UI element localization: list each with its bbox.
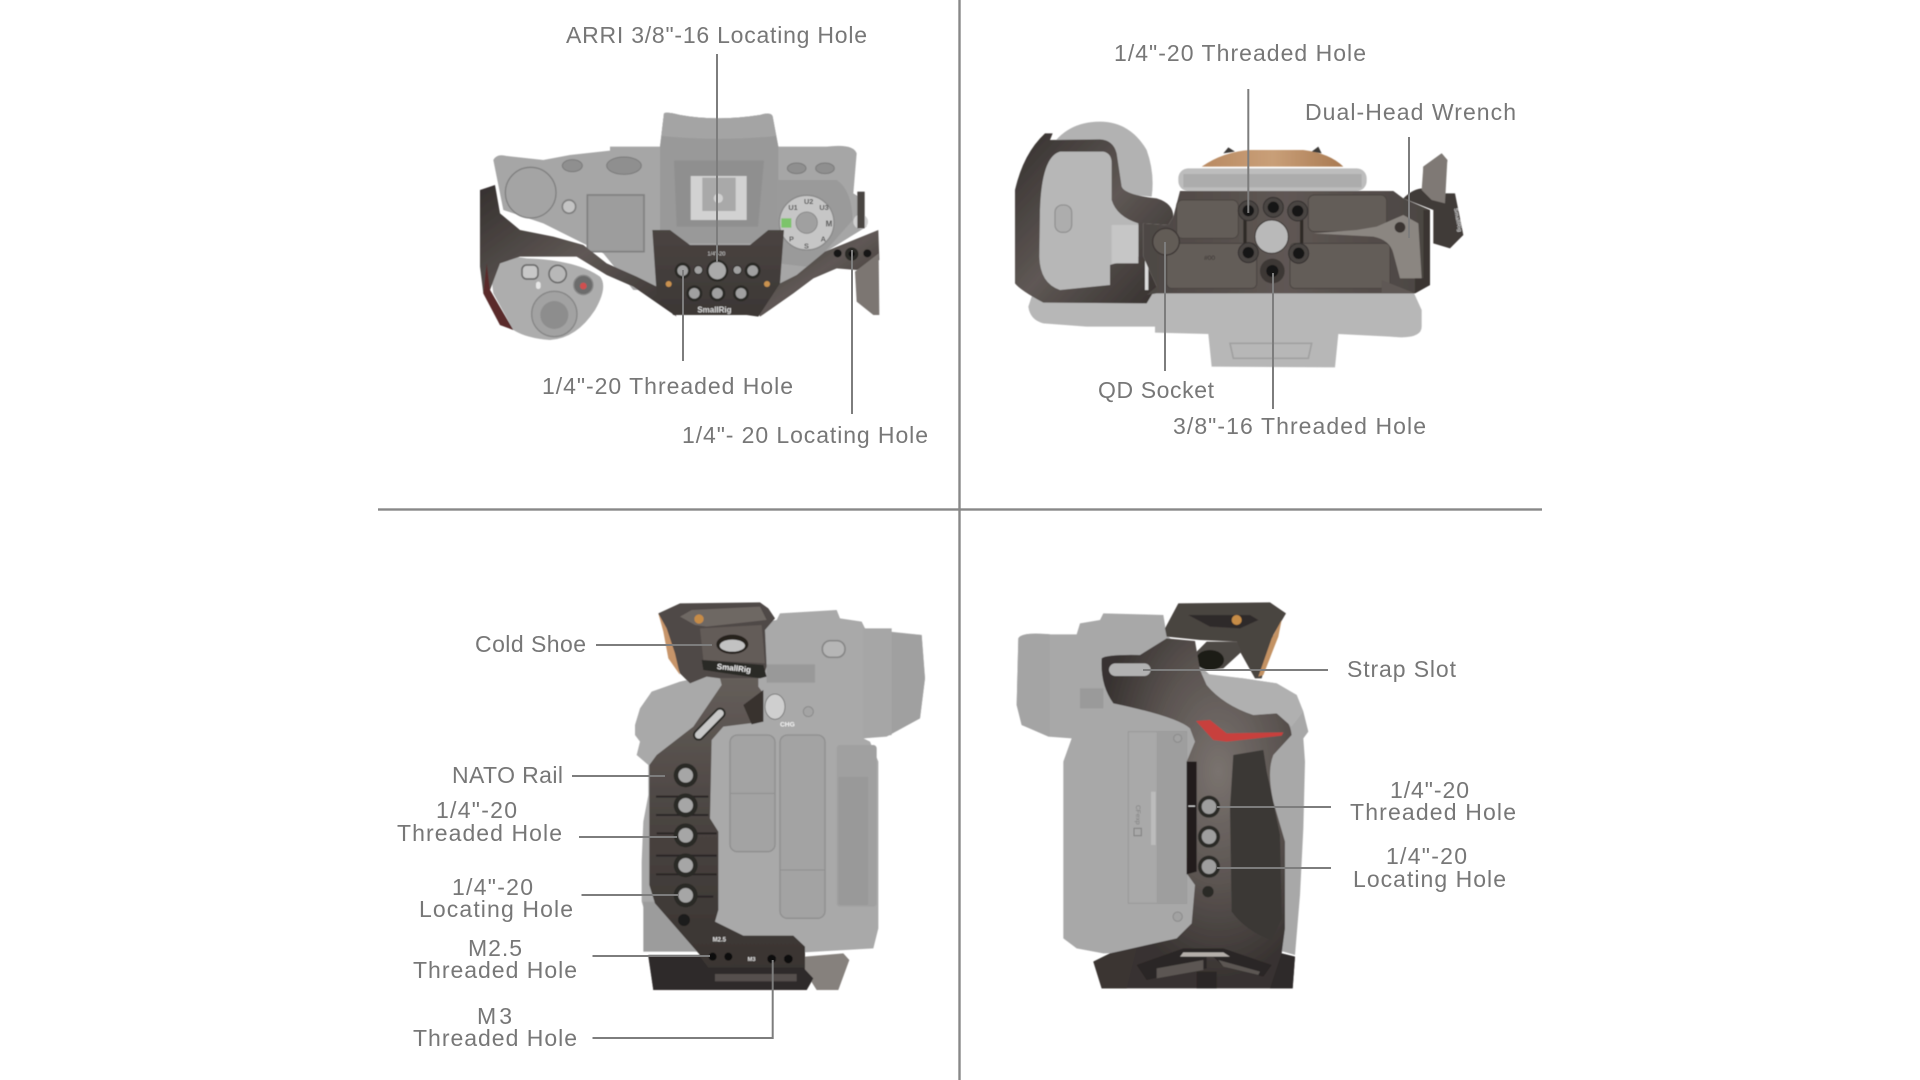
dark base	[648, 957, 813, 990]
base	[1093, 948, 1137, 988]
grip top	[490, 257, 603, 340]
label: M2.5 threaded hole	[413, 935, 710, 983]
lens cap	[1202, 150, 1343, 167]
rubber pad	[1230, 750, 1282, 940]
lower chamfer	[1382, 280, 1415, 293]
mode dial letters: P	[789, 235, 794, 244]
plate pockets	[1167, 195, 1390, 288]
gusset	[743, 690, 763, 724]
panel: top view	[480, 22, 928, 448]
label: strap slot: Strap Slot	[1347, 656, 1457, 682]
mode dial letters: A	[821, 235, 827, 244]
camera top view with cage	[480, 113, 879, 340]
foot	[805, 953, 849, 990]
mode dial letters: M	[826, 220, 833, 229]
side door	[1128, 732, 1187, 903]
wrench	[1313, 215, 1422, 278]
battery door	[1039, 152, 1138, 290]
label: locating hole: Locating Hole	[1353, 866, 1506, 892]
viewfinder	[660, 113, 778, 243]
label: QD socket: QD Socket	[1098, 377, 1215, 403]
logo: SmallRig	[697, 306, 732, 315]
top controls	[505, 167, 556, 218]
label: cold shoe: Cold Shoe	[475, 631, 586, 657]
plate holes	[666, 260, 770, 301]
strap slot	[1109, 663, 1151, 676]
label: M2.5 threaded hole: Threaded Hole	[413, 957, 577, 983]
horizontal divider	[378, 508, 1542, 511]
eyepiece	[892, 632, 925, 733]
camera bottom view with cage	[1015, 122, 1463, 367]
red accent	[1196, 720, 1283, 742]
camera right side with cage: CFexp	[1134, 805, 1141, 825]
camera left side with cage: M3	[748, 957, 756, 963]
mode dial letters	[788, 197, 833, 250]
vertical divider	[958, 0, 961, 1080]
panel: bottom view	[1015, 40, 1516, 439]
port doors	[730, 735, 775, 852]
strap slot	[699, 713, 720, 735]
NATO holes	[674, 763, 698, 926]
top plate	[1165, 602, 1286, 678]
panel: right side view	[1017, 602, 1516, 988]
label: ARRI locating hole: ARRI 3/8"-16 Locating Hole	[566, 22, 867, 48]
camera right side with cage	[1017, 602, 1308, 988]
side holes	[1198, 796, 1220, 897]
knob	[765, 694, 785, 719]
QD socket	[1153, 228, 1179, 255]
panel: left side view	[397, 602, 925, 1051]
cage: centre plate	[652, 230, 784, 317]
mode dial letters: U1	[788, 203, 798, 212]
label: locating hole: 1/4"-20	[452, 874, 533, 900]
label: threaded hole: 1/4"-20 Threaded Hole	[542, 373, 793, 399]
top shoe	[658, 602, 775, 683]
label: locating hole	[1217, 843, 1506, 892]
label: NATO rail: NATO Rail	[452, 762, 563, 788]
mode dial	[779, 195, 834, 250]
label: M3 threaded hole	[413, 960, 773, 1051]
label: threaded hole: 1/4"-20	[1390, 777, 1469, 803]
cage: arms	[480, 185, 677, 330]
label: threaded hole: Threaded Hole	[397, 820, 562, 846]
logo: SmallRig	[716, 662, 751, 675]
base holes	[703, 948, 793, 965]
camera body	[1028, 292, 1422, 367]
logo: SmallRig	[1452, 208, 1462, 233]
label: locating hole: Locating Hole	[419, 896, 573, 922]
eyepiece	[1017, 634, 1050, 737]
label: locating hole: 1/4"-20	[1386, 843, 1467, 869]
plate engraving: 1/4"-20	[707, 251, 725, 257]
label: threaded hole: Threaded Hole	[1350, 799, 1516, 825]
label: 3/8 threaded hole: 3/8"-16 Threaded Hole	[1173, 413, 1426, 439]
label: threaded hole	[397, 797, 677, 846]
camera left side with cage: CHG	[780, 722, 795, 729]
label: M2.5 threaded hole: M2.5	[468, 935, 522, 961]
label: M3 threaded hole: M3	[477, 1003, 512, 1029]
mode dial letters: U3	[819, 203, 829, 212]
label: threaded hole: 1/4"-20	[436, 797, 517, 823]
base plate	[1143, 191, 1430, 295]
camera body	[1017, 613, 1308, 955]
label: M3 threaded hole: Threaded Hole	[413, 1025, 577, 1051]
label: threaded hole	[1217, 777, 1516, 825]
mode dial letters: U2	[804, 197, 813, 206]
label: locating hole: 1/4"- 20 Locating Hole	[682, 422, 928, 448]
dials showing through	[1202, 673, 1303, 727]
hot shoe	[674, 161, 764, 227]
camera left side with cage	[635, 602, 925, 990]
wing holes	[834, 247, 871, 261]
mounting holes	[1238, 197, 1309, 283]
label: dual-head wrench: Dual-Head Wrench	[1305, 99, 1516, 125]
dark strip	[1187, 762, 1197, 874]
engraving: #00	[1204, 255, 1215, 262]
mode dial letters: S	[804, 241, 809, 250]
grooves	[656, 797, 717, 897]
side tab	[1403, 153, 1463, 248]
flap	[855, 253, 879, 315]
grip	[1093, 638, 1295, 988]
grip	[1053, 122, 1153, 197]
camera body	[635, 610, 925, 953]
cage frame	[1015, 133, 1173, 303]
camera body	[493, 113, 867, 290]
label: threaded hole: 1/4"-20 Threaded Hole	[1114, 40, 1366, 66]
cage	[648, 678, 813, 990]
label: locating hole	[419, 874, 678, 922]
engravings: M2.5	[713, 938, 727, 944]
